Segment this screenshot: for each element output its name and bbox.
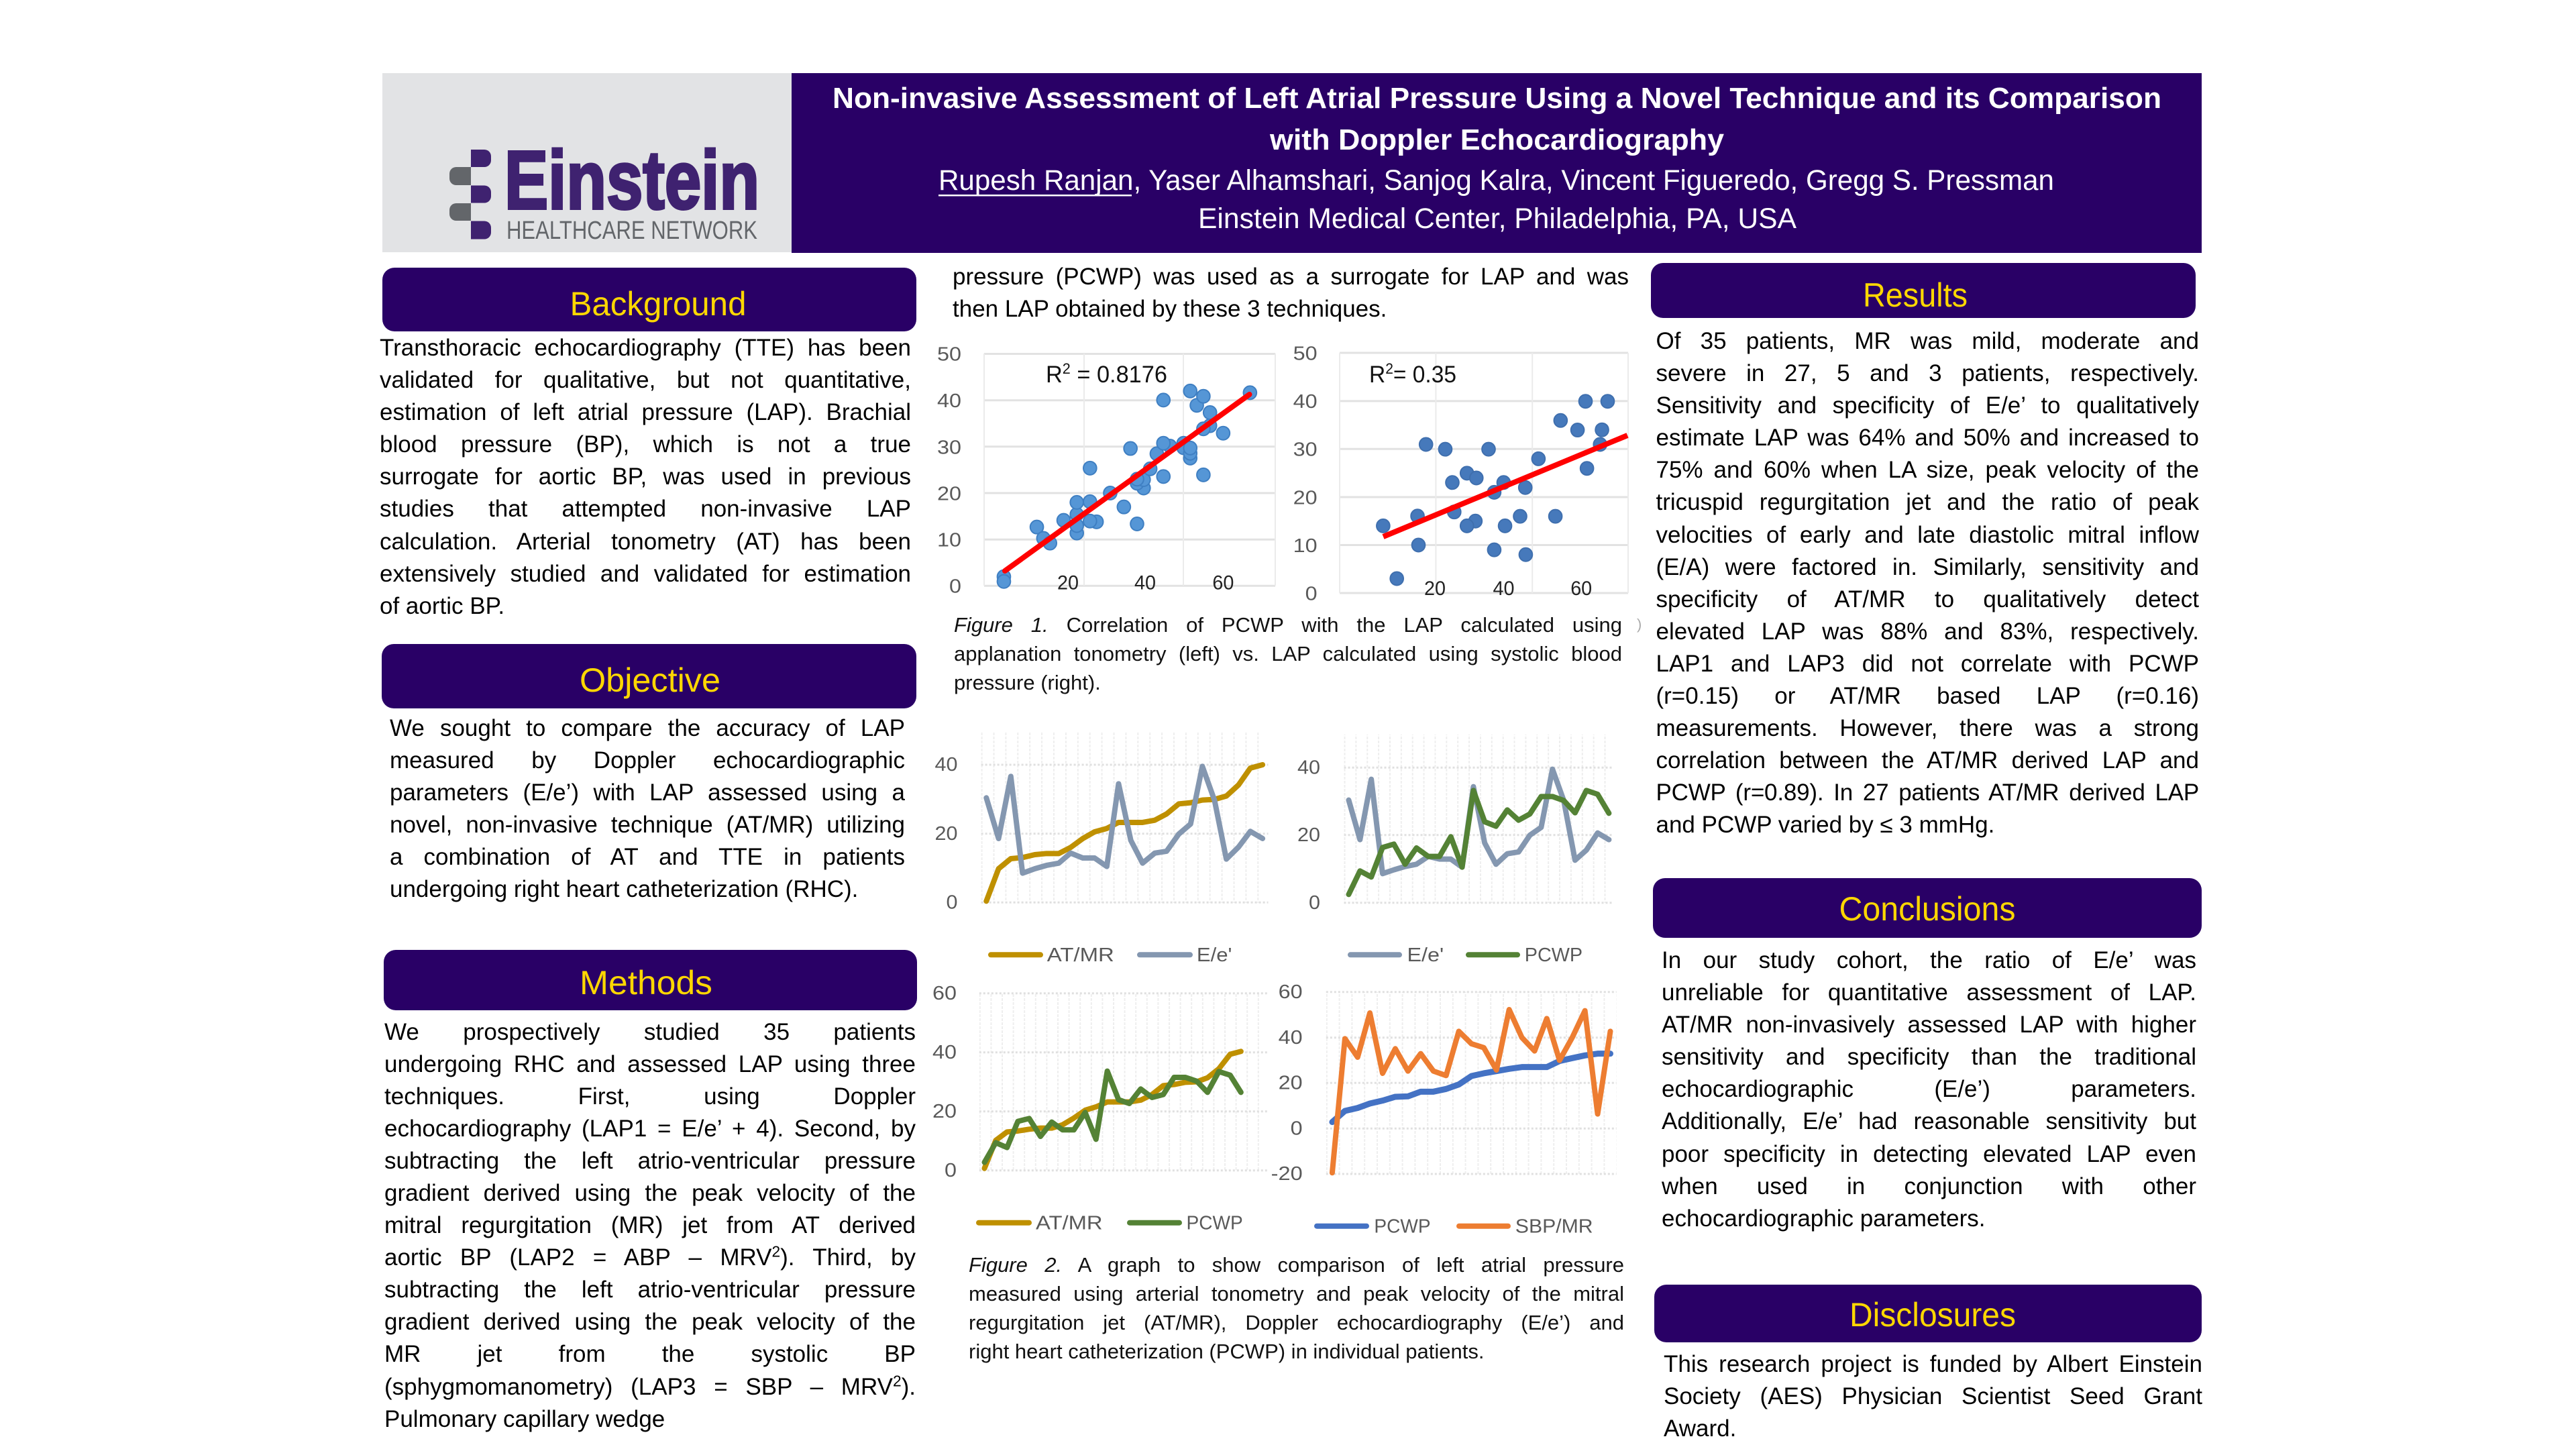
text: ) [1637,616,1642,633]
text: Conclusions body: poor specificity in detecting elevated LAP even [1662,1141,2196,1167]
text: Methods body [384,1018,916,1432]
text: Results body: severe in 27, 5 and 3 patients, respectively. [1656,360,2199,386]
line chart: AT/MR vs PCWP: 40 [932,1042,957,1063]
text: Results body [1656,328,2199,838]
text: Background body: Transthoracic echocardiography (TTE) has been [380,335,911,361]
line chart: E/e' vs PCWP [1297,735,1613,966]
text: Methods body: (sphygmomanometry) (LAP3 = SBP – MRV2). [384,1372,916,1400]
line chart: E/e' vs PCWP: 20 [1297,824,1320,846]
logo: Einstein Healthcare Network: HEALTHCARE NETWORK [506,217,757,245]
text: Methods continued [953,264,1629,322]
scatter chart: PCWP vs LAP by applanation tonometry (left): 2 [1063,360,1071,377]
text: Conclusions body: echocardiographic (E/e’) parameters. [1662,1076,2196,1102]
text: Background body: of aortic BP. [380,593,504,619]
heading: Results: Results [1863,276,1968,314]
text: Methods body: gradient derived using the peak velocity of the [384,1180,916,1206]
text: Methods body: MR jet from the systolic BP [384,1341,916,1367]
caption: Figure 2: measured using arterial tonometry and peak velocity of the mitral [969,1282,1624,1305]
text: Background body: surrogate for aortic BP, was used in previous [380,464,911,490]
heading: Conclusions [1653,878,2202,938]
text: Methods body: gradient derived using the peak velocity of the [384,1309,916,1335]
text: Methods body: Pulmonary capillary wedge [384,1406,665,1432]
text: Methods body: We prospectively studied 35 patients [384,1018,916,1045]
text: Objective body: undergoing right heart catheterization (RHC). [390,876,858,902]
text: Objective body: We sought to compare the accuracy of LAP [390,715,905,741]
heading: Methods: Methods [580,964,712,1002]
text: Conclusions body: unreliable for quantitative assessment of LAP. [1662,979,2196,1006]
text: Results body: correlation between the AT/MR derived LAP and [1656,747,2199,773]
text: Objective body: measured by Doppler echocardiographic [390,747,905,773]
scatter chart: PCWP vs LAP by applanation tonometry (left): R [1046,362,1063,388]
text: Results body: and PCWP varied by ≤ 3 mmHg. [1656,812,1994,838]
caption: Figure 1: pressure (right). [954,671,1101,694]
title banner: with Doppler Echocardiography [1269,123,1725,156]
heading: Objective: Objective [580,661,720,699]
text: Background body: extensively studied and validated for estimation [380,561,911,587]
line chart: AT/MR vs E/e': 0 [946,892,958,914]
scatter chart: PCWP vs LAP by systolic blood pressure (right): R [1369,362,1386,388]
text: Results body: Of 35 patients, MR was mild, moderate and [1656,328,2199,354]
caption: Figure 1 [954,613,1622,694]
line chart: AT/MR vs E/e': 20 [935,823,958,845]
title banner: Rupesh Ranjan, Yaser Alhamshari, Sanjog Kalra, Vincent Figueredo, Gregg S. Pressman [938,164,2054,197]
scatter chart: PCWP vs LAP by systolic blood pressure (right): = 0.35 [1393,362,1456,388]
text: Conclusions body: In our study cohort, the ratio of E/e’ was [1662,947,2196,973]
text: Conclusions body [1662,947,2196,1232]
scatter chart: PCWP vs LAP by systolic blood pressure (right): 40 [1293,391,1318,413]
scatter chart: PCWP vs LAP by applanation tonometry (left): 20 [1057,572,1079,594]
line chart: PCWP vs SBP/MR: 0 [1291,1118,1303,1140]
text: Results body: velocities of early and late diastolic mitral inflow [1656,522,2199,548]
scatter chart: PCWP vs LAP by applanation tonometry (left): 30 [937,437,961,458]
text: Results body: Sensitivity and specificity of E/e’ to qualitatively [1656,392,2199,419]
text: Background body: estimation of left atrial pressure (LAP). Brachial [380,399,911,425]
scatter chart: PCWP vs LAP by applanation tonometry (left): 40 [937,390,961,412]
caption: Figure 2 [969,1253,1624,1363]
text: Conclusions body: Additionally, E/e’ had reasonable sensitivity but [1662,1108,2196,1134]
line chart: AT/MR vs PCWP: 20 [932,1101,957,1122]
scatter chart: PCWP vs LAP by systolic blood pressure (right): 20 [1293,487,1318,508]
line chart: PCWP vs SBP/MR: 60 [1279,981,1303,1003]
caption: Figure 1: applanation tonometry (left) vs. LAP calculated using systolic blood [954,642,1622,665]
caption: Figure 2: Figure 2. A graph to show comparison of left atrial pressure [969,1253,1624,1277]
line chart: PCWP vs SBP/MR: -20 [1271,1163,1303,1185]
text: Objective body: a combination of AT and TTE in patients [390,844,905,870]
text: Objective body [390,715,905,902]
line chart: PCWP vs SBP/MR: 40 [1279,1027,1303,1049]
heading: Background [382,268,916,331]
caption: Figure 2: regurgitation jet (AT/MR), Doppler echocardiography (E/e’) and [969,1311,1624,1334]
text: Conclusions body: echocardiographic parameters. [1662,1205,1985,1232]
text: Background body: studies that attempted non-invasive LAP [380,496,911,522]
text: Objective body: parameters (E/e’) with LAP assessed using a [390,780,905,806]
scatter chart: PCWP vs LAP by applanation tonometry (left) [937,343,1275,598]
text: Results body: PCWP (r=0.89). In 27 patients AT/MR derived LAP [1656,780,2199,806]
scatter chart: PCWP vs LAP by systolic blood pressure (right): 2 [1385,360,1393,377]
heading: Conclusions: Conclusions [1839,890,2015,928]
line chart: AT/MR vs E/e' [935,731,1269,966]
scatter chart: PCWP vs LAP by systolic blood pressure (right) [1293,343,1628,604]
text: Background body: validated for qualitative, but not quantitative, [380,367,911,393]
text: Methods continued: then LAP obtained by these 3 techniques. [953,296,1387,322]
line chart: AT/MR vs E/e': 40 [935,754,958,775]
line chart: AT/MR vs PCWP: 60 [932,983,957,1004]
heading: Background: Background [570,285,746,323]
line chart: E/e' vs PCWP: E/e' [1407,945,1444,966]
text: Background body [380,335,911,619]
text: Results body: specificity of AT/MR to qualitatively detect [1656,586,2199,612]
text: Methods body: mitral regurgitation (MR) jet from AT derived [384,1212,916,1238]
line chart: AT/MR vs PCWP [932,983,1268,1234]
line chart: AT/MR vs PCWP: PCWP [1186,1213,1243,1234]
line chart: AT/MR vs PCWP: AT/MR [1036,1213,1103,1234]
text: Methods body: echocardiography (LAP1 = E/e’ + 4). Second, by [384,1116,916,1142]
scatter chart: PCWP vs LAP by systolic blood pressure (right): 0 [1305,583,1318,604]
line chart: AT/MR vs PCWP: 0 [945,1160,957,1181]
scatter chart: PCWP vs LAP by applanation tonometry (left): 20 [937,483,961,504]
text: Methods body: subtracting the left atrio-ventricular pressure [384,1148,916,1174]
text: Disclosures body: Society (AES) Physician Scientist Seed Grant [1664,1383,2202,1409]
text: Results body: tricuspid regurgitation jet and the ratio of peak [1656,489,2199,515]
text: Conclusions body: AT/MR non-invasively assessed LAP with higher [1662,1012,2196,1038]
text: Disclosures body: This research project is funded by Albert Einstein [1664,1351,2202,1377]
scatter chart: PCWP vs LAP by systolic blood pressure (right): 40 [1493,578,1515,600]
text: Results body: (E/A) were factored in. Similarly, sensitivity and [1656,554,2199,580]
text: Results body: elevated LAP was 88% and 83%, respectively. [1656,619,2199,645]
heading: Objective [382,644,916,708]
line chart: AT/MR vs E/e': AT/MR [1047,945,1114,966]
line chart: E/e' vs PCWP: PCWP [1525,945,1582,966]
scatter chart: PCWP vs LAP by applanation tonometry (left): 60 [1212,572,1234,594]
text: Methods continued: pressure (PCWP) was used as a surrogate for LAP and was [953,264,1629,290]
title banner: Einstein Medical Center, Philadelphia, PA, USA [1198,203,1796,235]
scatter chart: PCWP vs LAP by systolic blood pressure (right): 50 [1293,343,1318,364]
scatter chart: PCWP vs LAP by applanation tonometry (left): 40 [1134,572,1156,594]
line chart: PCWP vs SBP/MR: 20 [1279,1073,1303,1094]
line chart: PCWP vs SBP/MR: SBP/MR [1515,1216,1593,1238]
text: Results body: (r=0.15) or AT/MR based LAP (r=0.16) [1656,683,2199,709]
scatter chart: PCWP vs LAP by systolic blood pressure (right): 10 [1293,535,1318,557]
text: Results body: measurements. However, there was a strong [1656,715,2199,741]
scatter chart: PCWP vs LAP by applanation tonometry (left): 50 [937,343,961,365]
heading: Methods [384,950,917,1010]
line chart: E/e' vs PCWP: 40 [1297,757,1320,779]
scatter chart: PCWP vs LAP by systolic blood pressure (right): 20 [1424,578,1446,600]
line chart: PCWP vs SBP/MR [1271,981,1617,1238]
heading: Results [1651,263,2196,318]
scatter chart: PCWP vs LAP by systolic blood pressure (right): 60 [1570,578,1592,600]
text: Methods body: subtracting the left atrio-ventricular pressure [384,1277,916,1303]
scatter chart: PCWP vs LAP by systolic blood pressure (right): 30 [1293,439,1318,460]
text: Methods body: aortic BP (LAP2 = ABP – MRV2). Third, by [384,1242,916,1271]
text: Conclusions body: when used in conjunction with other [1662,1173,2196,1199]
scatter chart: PCWP vs LAP by applanation tonometry (left): 10 [937,529,961,551]
text: Methods body: techniques. First, using Doppler [384,1083,916,1110]
logo: Einstein Healthcare Network [382,73,792,252]
logo: Einstein Healthcare Network: Einstein [504,135,759,227]
text: Results body: 75% and 60% when LA size, peak velocity of the [1656,457,2199,483]
text: Results body: LAP1 and LAP3 did not correlate with PCWP [1656,651,2199,677]
text: Conclusions body: sensitivity and specificity than the traditional [1662,1044,2196,1070]
line chart: AT/MR vs E/e': E/e' [1197,945,1232,966]
scatter chart: PCWP vs LAP by applanation tonometry (left): 0 [949,576,961,598]
text: Disclosures body: Award. [1664,1415,1736,1442]
text: Objective body: novel, non-invasive technique (AT/MR) utilizing [390,812,905,838]
title banner: Non-invasive Assessment of Left Atrial Pressure Using a Novel Technique and its Comparison [833,82,2161,115]
text: Results body: estimate LAP was 64% and 50% and increased to [1656,425,2199,451]
text: Disclosures body [1664,1348,2202,1445]
line chart: PCWP vs SBP/MR: PCWP [1374,1216,1431,1238]
text: Methods body: undergoing RHC and assessed LAP using three [384,1051,916,1077]
caption: Figure 1: Figure 1. Correlation of PCWP with the LAP calculated using [954,613,1622,637]
line chart: E/e' vs PCWP: 0 [1309,892,1320,914]
heading: Disclosures [1654,1285,2202,1342]
heading: Disclosures: Disclosures [1849,1296,2016,1334]
scatter chart: PCWP vs LAP by applanation tonometry (left): = 0.8176 [1071,362,1167,388]
text: Background body: calculation. Arterial tonometry (AT) has been [380,529,911,555]
title banner [792,73,2202,253]
text: Background body: blood pressure (BP), which is not a true [380,431,911,458]
caption: Figure 2: right heart catheterization (PCWP) in individual patients. [969,1340,1484,1363]
